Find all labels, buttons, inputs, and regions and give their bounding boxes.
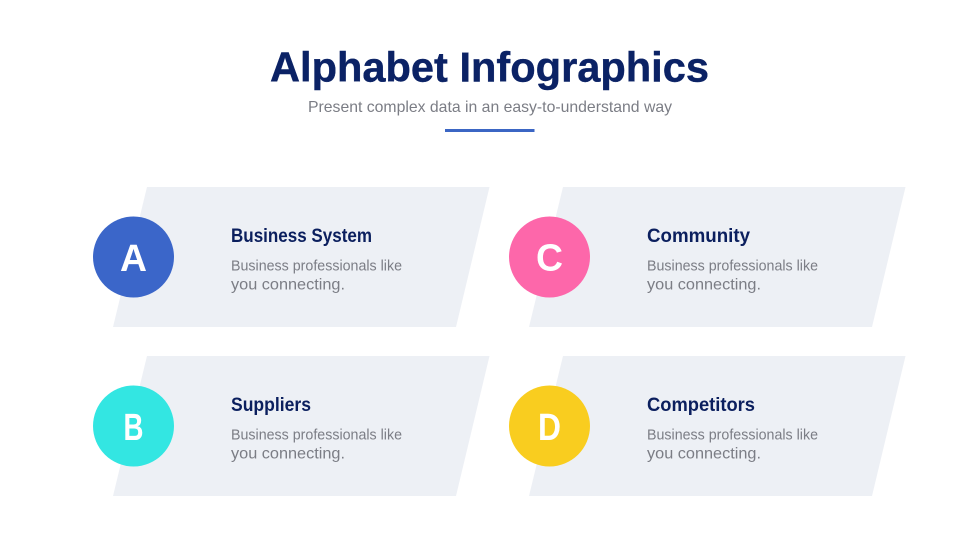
- heading: Suppliers: Suppliers: [231, 395, 311, 416]
- badge B: B: [124, 407, 144, 449]
- description D: [647, 426, 818, 463]
- panel: Community: [509, 187, 906, 327]
- panel: Competitors: [509, 356, 906, 496]
- description A: you connecting.: [231, 276, 345, 294]
- description B: Business professionals like: [231, 426, 402, 443]
- badge A: [93, 216, 174, 298]
- description A: [231, 257, 402, 294]
- description C: Business professionals like: [647, 257, 818, 274]
- badge D: [509, 386, 590, 466]
- badge D: D: [538, 407, 561, 449]
- panel background A: [113, 187, 490, 327]
- badge B: [93, 386, 174, 466]
- description D: you connecting.: [647, 446, 761, 463]
- panel background C: [529, 187, 906, 327]
- title: Alphabet Infographics: [270, 44, 709, 90]
- badge C: C: [536, 238, 563, 280]
- description B: [231, 426, 402, 463]
- description B: you connecting.: [231, 446, 345, 463]
- description D: Business professionals like: [647, 426, 818, 443]
- description A: Business professionals like: [231, 257, 402, 274]
- panel background B: [113, 356, 490, 496]
- panel: Business System: [93, 187, 490, 327]
- panel: Suppliers: [93, 356, 490, 496]
- badge C: [509, 216, 590, 298]
- description C: you connecting.: [647, 276, 761, 294]
- badge A: A: [120, 238, 147, 280]
- heading: Competitors: Competitors: [647, 395, 755, 416]
- description C: [647, 257, 818, 294]
- subtitle: Present complex data in an easy-to-understand way: [308, 99, 672, 116]
- heading: Community: Community: [647, 226, 750, 247]
- heading: Business System: Business System: [231, 226, 372, 247]
- title underline: [445, 129, 534, 132]
- panel background D: [529, 356, 906, 496]
